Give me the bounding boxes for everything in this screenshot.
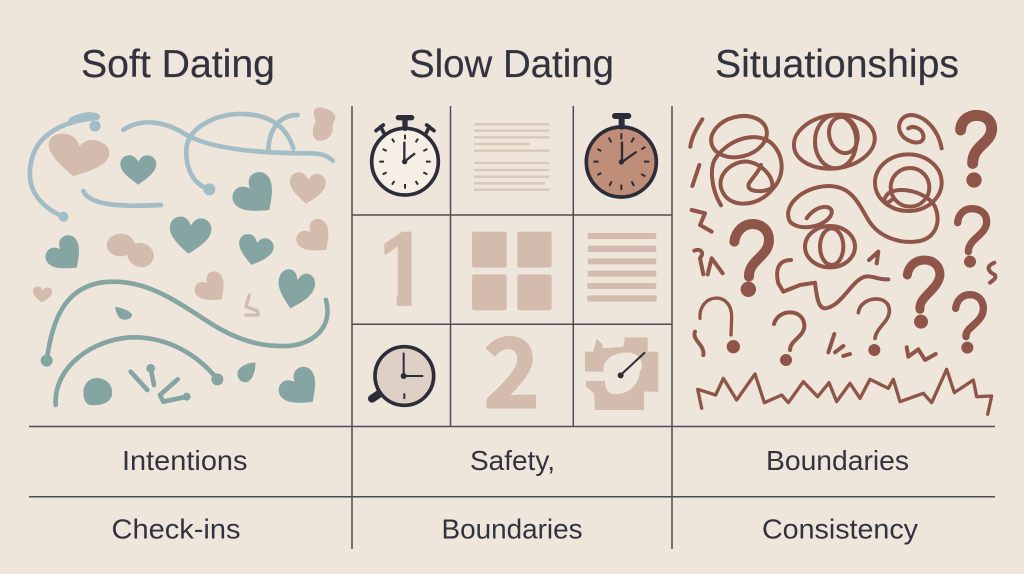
numeral 1 [384,232,412,306]
title: Soft Dating: Soft Dating [81,43,275,86]
panel: soft dating illustration [30,108,339,415]
question marks [700,115,992,366]
teal curves [41,282,328,405]
label: Check-ins: Check-ins [112,514,240,544]
text lines: thick [587,233,657,302]
panel: slow dating grid [372,116,658,435]
numeral 1: 1 [376,211,434,327]
tan hearts [32,108,339,315]
teal hearts [42,155,328,415]
icon: brown stopwatch [586,116,656,197]
icon: white stopwatch [372,118,438,195]
panel: situationships illustration [690,110,995,414]
numeral 2: 2 [483,296,540,435]
label: Boundaries: Boundaries [766,445,909,476]
title: Situationships: Situationships [715,43,959,86]
title: Slow Dating: Slow Dating [409,43,614,86]
tangled scribbles [690,110,995,360]
text lines: thin [474,124,549,190]
icon: broken gauge [583,337,658,410]
icon: magnifier clock [372,347,434,405]
label: Safety,: Safety, [470,445,555,476]
light blue curves [30,114,333,222]
zigzag line [698,369,992,414]
label: Consistency: Consistency [762,514,918,544]
four squares [472,232,552,310]
label: Intentions: Intentions [122,445,248,476]
label: Boundaries: Boundaries [442,514,582,544]
